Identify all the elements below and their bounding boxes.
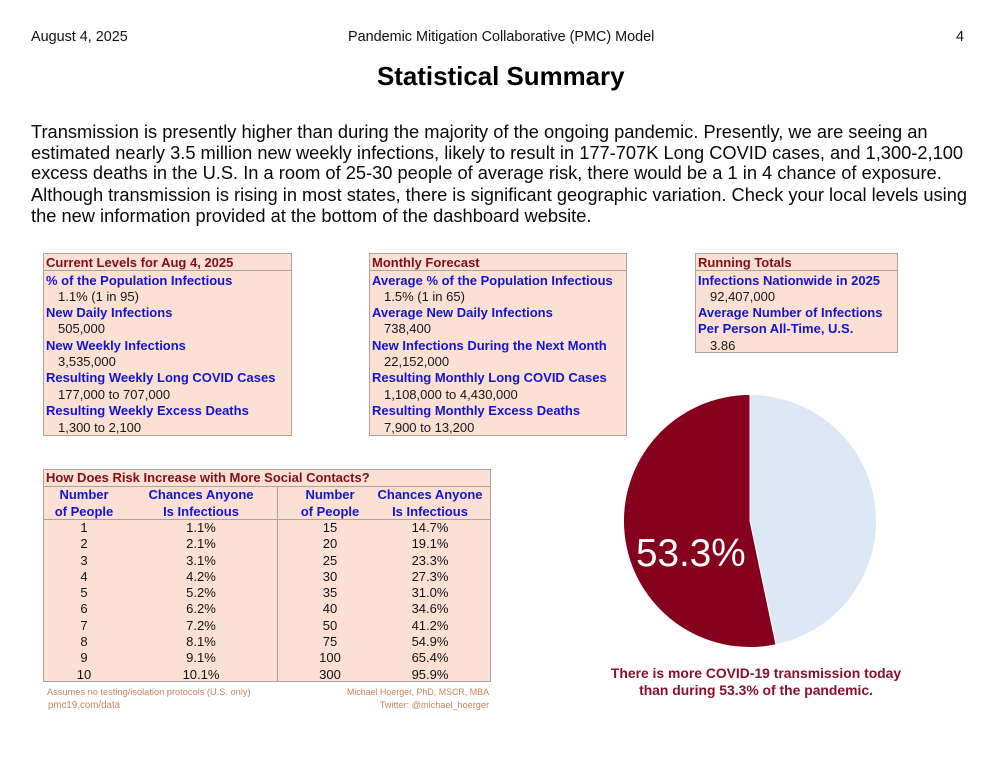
panel: monthly forecast: 7,900 to 13,200 (384, 420, 474, 435)
intro text block: Transmission is presently higher than during the majority of the ongoing pandemic. Presently, we are seeing an (31, 121, 928, 142)
table rows: 40 (323, 601, 337, 616)
table rows: 4.2% (186, 569, 216, 584)
footnote: author credit: Twitter: @michael_hoerger (380, 700, 489, 710)
panel: current levels: New Daily Infections (46, 305, 172, 320)
panel: current levels: 3,535,000 (58, 354, 116, 369)
table column headers (55, 487, 482, 519)
table rows: 9.1% (186, 650, 216, 665)
table rows: 95.9% (412, 667, 448, 682)
table rows: 50 (323, 618, 337, 633)
panel: running totals (695, 253, 898, 353)
table rows: 3 (80, 553, 88, 568)
table rows: 10.1% (183, 667, 219, 682)
panel: monthly forecast: Average New Daily Infections (372, 305, 553, 320)
table rows: 7.2% (186, 618, 216, 633)
table rows: 27.3% (412, 569, 448, 584)
panel: running totals: 3.86 (710, 338, 735, 353)
intro text block (31, 121, 967, 226)
panel: running totals: Per Person All-Time, U.S. (698, 321, 853, 336)
table column headers: Chances Anyone (378, 487, 482, 502)
table rows: 9 (80, 650, 88, 665)
table rows: 7 (80, 618, 88, 633)
footnote: assumptions and source: Assumes no testing/isolation protocols (U.S. only) (47, 687, 251, 697)
table rows: 8 (80, 634, 88, 649)
table rows: 4 (80, 569, 88, 584)
table rows: 75 (323, 634, 337, 649)
panel: risk table (43, 469, 491, 682)
table rows: 6 (80, 601, 88, 616)
table column headers: of People (301, 504, 359, 519)
table rows: 6.2% (186, 601, 216, 616)
table rows: 100 (319, 650, 341, 665)
table rows: 2 (80, 536, 88, 551)
panel: monthly forecast: New Infections During the Next Month (372, 338, 607, 353)
panel: monthly forecast: 1,108,000 to 4,430,000 (384, 387, 518, 402)
panel: monthly forecast: Resulting Monthly Excess Deaths (372, 403, 580, 418)
panel: running totals: 92,407,000 (710, 289, 775, 304)
panel: current levels: 1.1% (1 in 95) (58, 289, 139, 304)
table rows: 10 (77, 667, 91, 682)
intro text block: excess deaths in the U.S. In a room of 25-30 people of average risk, there would be a 1 in 4 chance of exposure. (31, 162, 942, 183)
panel: current levels: Resulting Weekly Long COVID Cases (46, 370, 275, 385)
heading: monthly forecast: Monthly Forecast (372, 255, 480, 270)
table rows: 1.1% (186, 520, 216, 535)
panel: running totals: Average Number of Infections (698, 305, 882, 320)
panel: current levels: New Weekly Infections (46, 338, 186, 353)
table rows: 5.2% (186, 585, 216, 600)
footnote: assumptions and source: pmc19.com/data (48, 700, 120, 711)
panel: current levels: 505,000 (58, 321, 105, 336)
table column headers: Number (59, 487, 109, 502)
table rows: 41.2% (412, 618, 448, 633)
pie slice: remainder (750, 395, 876, 644)
pie caption: There is more COVID-19 transmission today (611, 665, 901, 681)
table rows: 19.1% (412, 536, 448, 551)
table rows: 34.6% (412, 601, 448, 616)
table rows: 1 (80, 520, 88, 535)
table rows: 23.3% (412, 553, 448, 568)
heading: current levels: Current Levels for Aug 4, 2025 (46, 255, 233, 270)
table rows (77, 520, 448, 682)
table rows: 35 (323, 585, 337, 600)
table column headers: Is Infectious (163, 504, 239, 519)
panel: monthly forecast (369, 253, 627, 436)
table rows: 3.1% (186, 553, 216, 568)
table rows: 25 (323, 553, 337, 568)
pie slice divider (750, 395, 776, 644)
table rows: 300 (319, 667, 341, 682)
panel: current levels (43, 253, 292, 436)
table rows: 5 (80, 585, 88, 600)
footnote: author credit: Michael Hoerger, PhD, MSCR, MBA (347, 687, 489, 697)
heading: risk table: How Does Risk Increase with More Social Contacts? (46, 470, 370, 485)
table rows: 2.1% (186, 536, 216, 551)
table rows: 15 (323, 520, 337, 535)
footnote: assumptions and source (47, 687, 251, 711)
intro text block: the new information provided at the bottom of the dashboard website. (31, 205, 592, 226)
table column headers: of People (55, 504, 113, 519)
page header: page number: 4 (956, 29, 964, 45)
intro text block: Although transmission is rising in most states, there is significant geographic variation. Check your local levels using (31, 184, 967, 205)
intro text block: estimated nearly 3.5 million new weekly infections, likely to result in 177-707K Long COVID cases, and 1,300-2,100 (31, 142, 963, 163)
panel: monthly forecast: 738,400 (384, 321, 431, 336)
panel: monthly forecast: 22,152,000 (384, 354, 449, 369)
table rows: 8.1% (186, 634, 216, 649)
pie caption: than during 53.3% of the pandemic. (639, 682, 873, 698)
pie value label: 53.3% (636, 532, 746, 575)
table column headers: Is Infectious (392, 504, 468, 519)
table rows: 30 (323, 569, 337, 584)
table rows: 65.4% (412, 650, 448, 665)
panel: current levels: 177,000 to 707,000 (58, 387, 170, 402)
panel: current levels: % of the Population Infectious (46, 273, 232, 288)
pie caption (611, 665, 901, 698)
table column headers: Number (305, 487, 355, 502)
pie slice: 53.3% (624, 395, 776, 647)
panel: current levels: 1,300 to 2,100 (58, 420, 141, 435)
heading: running totals: Running Totals (698, 255, 792, 270)
panel: monthly forecast: Average % of the Population Infectious (372, 273, 613, 288)
footnote: author credit (347, 687, 489, 710)
table rows: 14.7% (412, 520, 448, 535)
page header: date: August 4, 2025 (31, 29, 128, 45)
panel: current levels: Resulting Weekly Excess Deaths (46, 403, 249, 418)
table rows: 20 (323, 536, 337, 551)
pie chart: 53.3% of the pandemic (624, 395, 876, 647)
table rows: 31.0% (412, 585, 448, 600)
title: Statistical Summary (377, 63, 625, 91)
panel: monthly forecast: Resulting Monthly Long COVID Cases (372, 370, 607, 385)
page header: model name: Pandemic Mitigation Collaborative (PMC) Model (348, 29, 654, 45)
table column headers: Chances Anyone (148, 487, 254, 502)
panel: running totals: Infections Nationwide in 2025 (698, 273, 880, 288)
panel: monthly forecast: 1.5% (1 in 65) (384, 289, 465, 304)
table rows: 54.9% (412, 634, 448, 649)
